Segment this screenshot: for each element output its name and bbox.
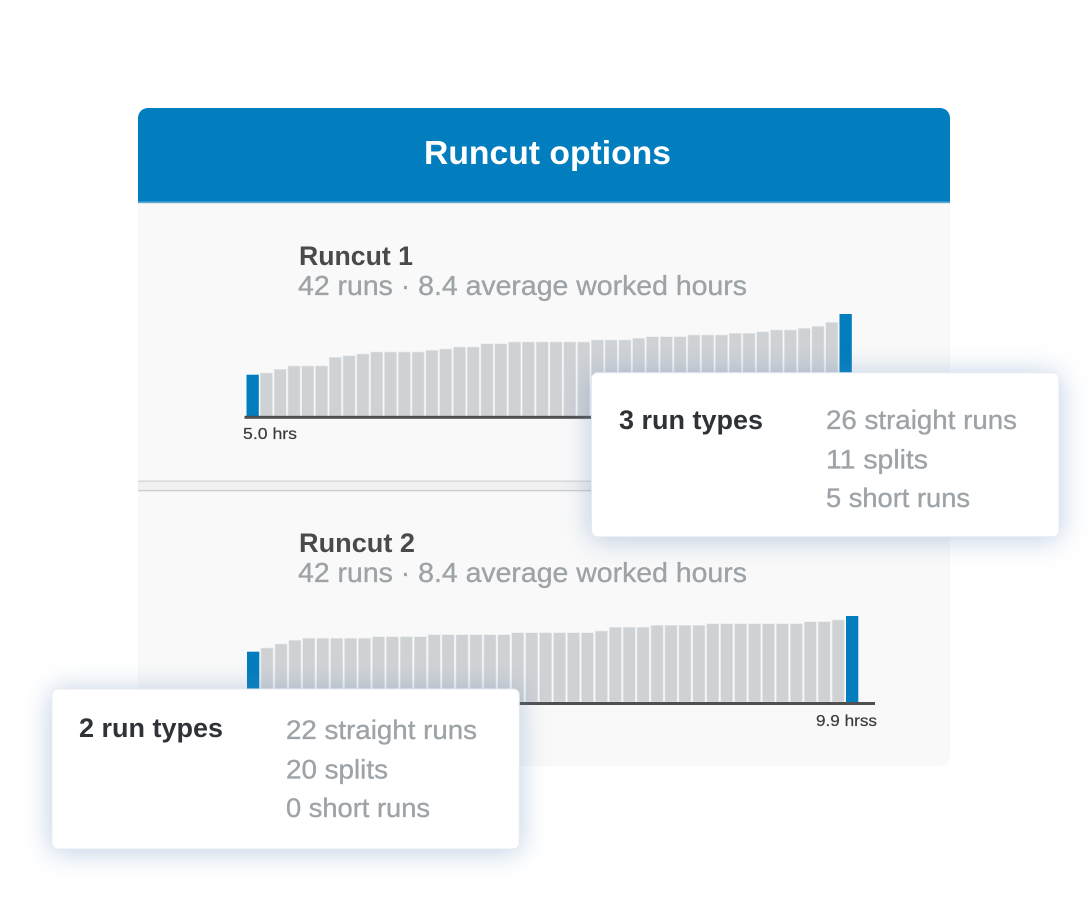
run type counts (286, 715, 477, 823)
callout heading: 3 run types (619, 405, 763, 435)
axis label: minimum hours: 5.0 hrs (243, 426, 297, 443)
callout heading: 2 run types (79, 713, 223, 743)
panel: runcut options card (138, 108, 950, 766)
bar chart: Runcut 1 (244, 314, 868, 419)
heading: Runcut 1: Runcut 1 (299, 241, 413, 271)
subheading: Runcut 2 stats: 42 runs · 8.4 average worked hours (298, 557, 747, 588)
callout: Runcut 2 run types (52, 689, 519, 849)
run type counts: 26 straight runs (826, 405, 1017, 435)
heading: Runcut 2: Runcut 2 (299, 528, 415, 558)
run type counts (826, 405, 1017, 513)
run type counts: 5 short runs (826, 483, 970, 513)
bar chart: Runcut 2 (245, 616, 875, 705)
run type counts: 22 straight runs (286, 715, 477, 745)
run type counts: 20 splits (286, 755, 388, 785)
header bar (138, 108, 950, 202)
axis label: maximum hours: 9.9 hrss (816, 713, 877, 730)
subheading: Runcut 1 stats: 42 runs · 8.4 average worked hours (298, 270, 747, 301)
title: Runcut options (424, 135, 671, 172)
callout: Runcut 1 run types (592, 373, 1059, 537)
run type counts: 0 short runs (286, 793, 430, 823)
run type counts: 11 splits (826, 444, 928, 474)
